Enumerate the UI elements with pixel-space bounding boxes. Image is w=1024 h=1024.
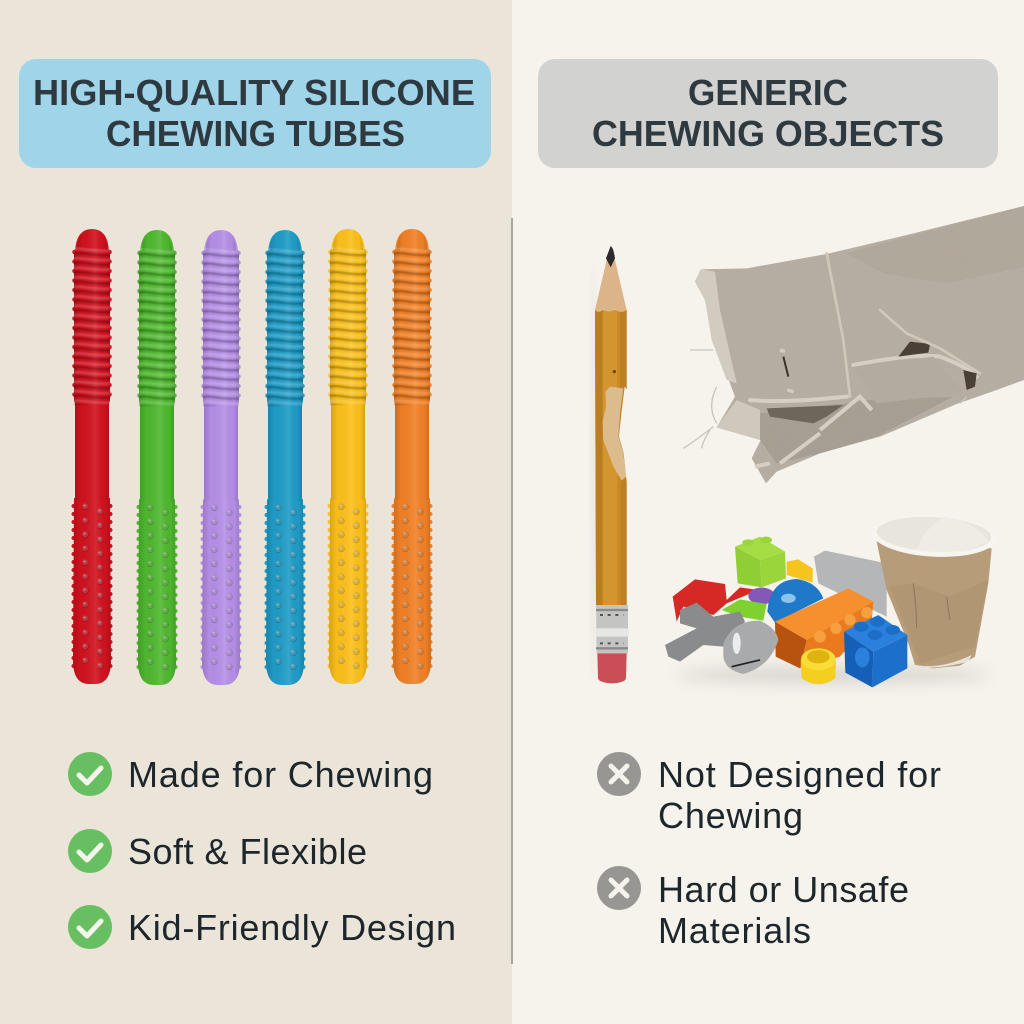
- benefit: made for chewing: Made for Chewing: [128, 754, 433, 795]
- grey metal block: [814, 551, 887, 617]
- panel: generic chewing objects: [511, 0, 1024, 1024]
- heading badge: generic chewing objects: CHEWING OBJECTS: [592, 113, 944, 154]
- purple ball: [748, 588, 775, 604]
- yellow ring: [801, 648, 836, 684]
- small yellow brick: [787, 559, 813, 583]
- crumpled paper cup: [871, 512, 997, 668]
- chewing tube: red: [73, 229, 111, 684]
- illustration: torn fabric sleeve: [683, 206, 1024, 483]
- chewing tube: green: [138, 230, 176, 685]
- drawback: not designed for chewing: [597, 752, 941, 836]
- green toy: [722, 599, 767, 621]
- illustration: broken toys and crumpled paper cup: [665, 512, 997, 687]
- grey broken toy: [665, 603, 778, 674]
- orange brick: [775, 588, 873, 668]
- heading badge: high-quality silicone chewing tubes: CHEWING TUBES: [106, 113, 405, 154]
- panel: high-quality silicone chewing tubes: [0, 0, 512, 1024]
- heading badge: generic chewing objects: [538, 59, 998, 168]
- heading badge: generic chewing objects: GENERIC: [688, 72, 848, 113]
- illustration: chewed pencil: [590, 246, 629, 683]
- drawback: hard or unsafe materials: [597, 866, 909, 951]
- chewing tube: yellow: [329, 229, 367, 684]
- heading badge: high-quality silicone chewing tubes: [19, 59, 491, 168]
- drawback: hard or unsafe materials: Hard or Unsafe: [658, 869, 909, 910]
- chewing tube: purple: [202, 230, 240, 685]
- drawback: not designed for chewing: Chewing: [658, 795, 803, 836]
- lime green brick: [735, 537, 786, 587]
- blue brick: [844, 615, 907, 687]
- red toy: [673, 579, 758, 622]
- benefit: kid-friendly design: Kid-Friendly Design: [128, 907, 456, 948]
- drawback: hard or unsafe materials: Materials: [658, 910, 811, 951]
- benefit: soft and flexible: Soft & Flexible: [128, 831, 367, 872]
- blue ball: [767, 579, 823, 623]
- chewing tube: blue: [266, 230, 304, 685]
- drawback: not designed for chewing: Not Designed for: [658, 754, 941, 795]
- chewing tube: orange: [393, 229, 431, 684]
- heading badge: high-quality silicone chewing tubes: HIGH-QUALITY SILICONE: [33, 72, 475, 113]
